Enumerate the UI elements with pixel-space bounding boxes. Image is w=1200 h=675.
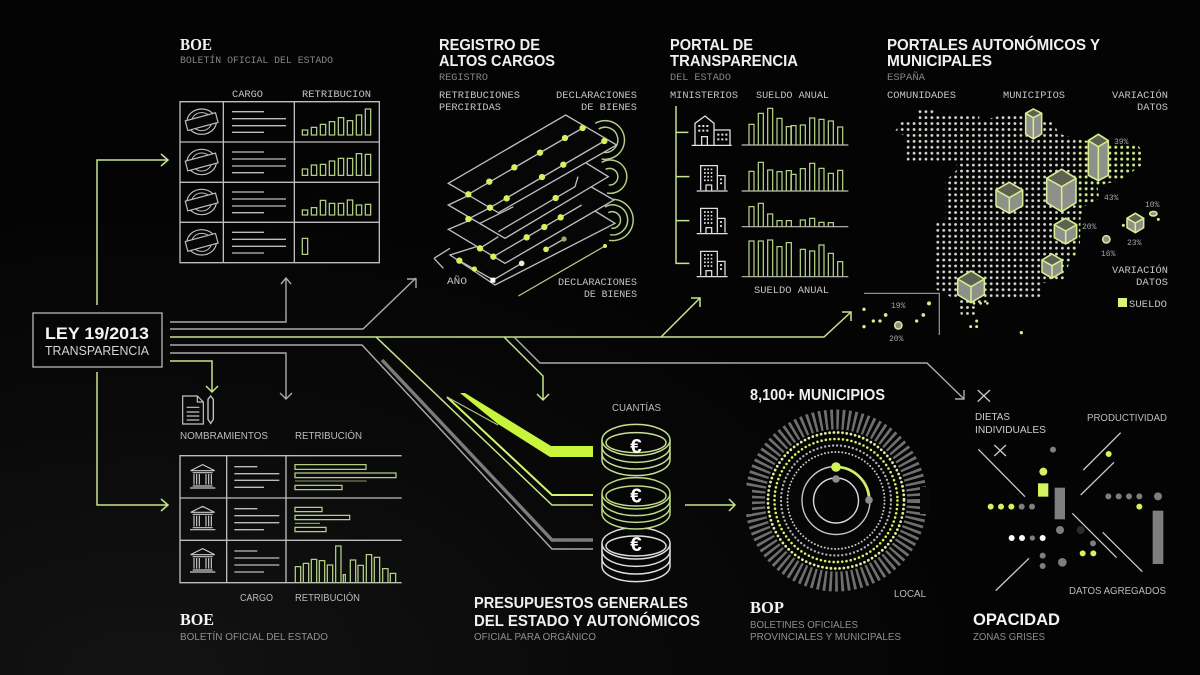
panel: BOE bottom: CARGO bbox=[240, 593, 273, 604]
panel: Portales autonomicos y municipales: 19% bbox=[891, 302, 906, 311]
panel: BOP: BOP bbox=[750, 598, 784, 617]
panel: Registro de altos cargos: DECLARACIONES bbox=[556, 91, 637, 102]
ministries bars and buildings bbox=[676, 106, 848, 277]
panel: Portales autonomicos y municipales: VARIACIÓN bbox=[1112, 263, 1168, 277]
panel: BOP: PROVINCIALES Y MUNICIPALES bbox=[750, 632, 901, 643]
dot map of Spain with cubes bbox=[862, 109, 1160, 335]
panel: Portal de transparencia: SUELDO ANUAL bbox=[756, 91, 829, 102]
panel: Portales autonomicos y municipales: 16% bbox=[1101, 250, 1116, 259]
layered registry diagram bbox=[434, 115, 633, 296]
table: cargo and retribution bbox=[180, 102, 379, 263]
panel: BOP bbox=[742, 387, 930, 643]
box: Ley 19/2013 bbox=[33, 313, 162, 367]
panel: Opacidad: DATOS AGREGADOS bbox=[1069, 586, 1166, 597]
panel: Portales autonomicos y municipales: COMUNIDADES bbox=[887, 91, 956, 102]
panel: Opacidad: DIETAS bbox=[975, 412, 1010, 423]
panel: Registro de altos cargos bbox=[434, 37, 637, 301]
panel: Presupuestos generales bbox=[474, 401, 700, 643]
panel: BOP: LOCAL bbox=[894, 589, 926, 600]
panel: Registro de altos cargos: REGISTRO DE bbox=[439, 37, 540, 54]
panel: Registro de altos cargos: DE BIENES bbox=[584, 290, 637, 301]
panel: Portales autonomicos y municipales: 20% bbox=[1082, 223, 1097, 232]
panel: Portales autonomicos y municipales: SUELDO bbox=[1129, 300, 1167, 311]
panel: Portales autonomicos y municipales: PORTALES AUTONÓMICOS Y bbox=[887, 36, 1101, 54]
panel: BOE bottom bbox=[180, 396, 402, 643]
icon: document and pen bbox=[183, 396, 213, 424]
panel: Portal de transparencia: MINISTERIOS bbox=[670, 91, 738, 102]
panel: Portales autonomicos y municipales: 20% bbox=[889, 335, 904, 344]
panel: Portales autonomicos y municipales: DATOS bbox=[1137, 103, 1168, 114]
panel: BOE top: RETRIBUCION bbox=[302, 90, 371, 101]
panel: BOE bottom: BOLETÍN OFICIAL DEL ESTADO bbox=[180, 630, 328, 643]
panel: Portal de transparencia bbox=[670, 37, 848, 297]
panel: Registro de altos cargos: PERCIRIDAS bbox=[439, 103, 501, 114]
panel: BOE bottom: RETRIBUCIÓN bbox=[295, 429, 362, 442]
panel: Opacidad bbox=[973, 390, 1167, 643]
panel: Opacidad: INDIVIDUALES bbox=[975, 425, 1046, 436]
panel: Registro de altos cargos: REGISTRO bbox=[439, 73, 488, 84]
box: Ley 19/2013: LEY 19/2013 bbox=[45, 324, 149, 343]
panel: BOE top: BOE bbox=[180, 35, 212, 54]
panel: Portales autonomicos y municipales: 23% bbox=[1127, 239, 1142, 248]
panel: Opacidad: PRODUCTIVIDAD bbox=[1087, 413, 1167, 424]
panel: Portales autonomicos y municipales: DATOS bbox=[1136, 278, 1168, 289]
panel: BOE top: CARGO bbox=[232, 90, 263, 101]
grey zones dot diagram bbox=[978, 390, 1163, 591]
panel: Portal de transparencia: DEL ESTADO bbox=[670, 73, 731, 84]
panel: Portales autonomicos y municipales: 10% bbox=[1145, 201, 1160, 210]
panel: BOE bottom: BOE bbox=[180, 610, 214, 629]
panel: Registro de altos cargos: DE BIENES bbox=[581, 103, 637, 114]
panel: Presupuestos generales: PRESUPUESTOS GENERALES bbox=[474, 595, 688, 612]
panel: BOE top bbox=[180, 35, 379, 263]
panel: BOP: BOLETINES OFICIALES bbox=[750, 620, 858, 631]
panel: Portal de transparencia: TRANSPARENCIA bbox=[670, 53, 798, 70]
panel: Registro de altos cargos: RETRIBUCIONES bbox=[439, 91, 520, 102]
panel: Portal de transparencia: PORTAL DE bbox=[670, 37, 753, 54]
panel: Portal de transparencia: SUELDO ANUAL bbox=[754, 286, 829, 297]
panel: Portales autonomicos y municipales: 43% bbox=[1104, 194, 1119, 203]
radial chart of municipalities bbox=[742, 420, 930, 582]
euro coin stacks bbox=[602, 424, 670, 582]
panel: BOP: 8,100+ MUNICIPIOS bbox=[750, 387, 885, 404]
box: Ley 19/2013: TRANSPARENCIA bbox=[45, 343, 149, 358]
panel: Portales autonomicos y municipales: 39% bbox=[1114, 138, 1129, 147]
panel: Presupuestos generales: DEL ESTADO Y AUTONÓMICOS bbox=[474, 612, 700, 630]
panel: Portales autonomicos y municipales: MUNICIPALES bbox=[887, 53, 992, 70]
panel: BOE top: BOLETÍN OFICIAL DEL ESTADO bbox=[180, 53, 333, 67]
panel: Portales autonomicos y municipales: ESPAÑA bbox=[887, 71, 925, 84]
panel: Registro de altos cargos: ALTOS CARGOS bbox=[439, 53, 555, 70]
euro coin stacks: € bbox=[630, 435, 642, 458]
table: nombramientos and retribution bbox=[180, 456, 402, 583]
panel: Presupuestos generales: OFICIAL PARA ORGÁNICO bbox=[474, 630, 596, 643]
panel: Registro de altos cargos: AÑO bbox=[447, 275, 467, 288]
panel: Portales autonomicos y municipales: VARIACIÓN bbox=[1112, 88, 1168, 102]
panel: BOE bottom: RETRIBUCIÓN bbox=[295, 591, 360, 604]
panel: Portales autonomicos y municipales bbox=[862, 36, 1168, 344]
panel: Presupuestos generales: CUANTÍAS bbox=[612, 401, 661, 414]
euro coin stacks: € bbox=[630, 484, 642, 507]
connector lines bbox=[97, 154, 964, 549]
panel: Registro de altos cargos: DECLARACIONES bbox=[558, 278, 637, 289]
panel: Opacidad: OPACIDAD bbox=[973, 610, 1060, 629]
panel: Portales autonomicos y municipales: MUNICIPIOS bbox=[1003, 91, 1065, 102]
euro coin stacks: € bbox=[630, 533, 642, 556]
panel: BOE bottom: NOMBRAMIENTOS bbox=[180, 431, 268, 442]
panel: Opacidad: ZONAS GRISES bbox=[973, 632, 1045, 643]
